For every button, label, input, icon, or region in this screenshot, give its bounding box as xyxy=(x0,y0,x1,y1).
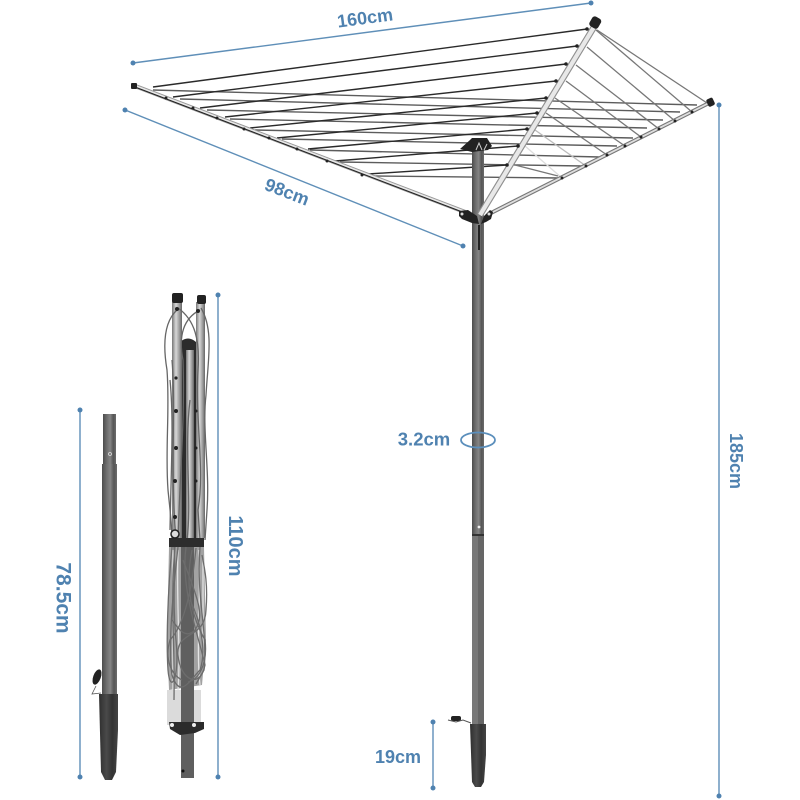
cap and cord xyxy=(91,668,103,694)
bundle stripes xyxy=(173,550,203,690)
tube mark xyxy=(108,452,112,456)
label 19cm: 19cm xyxy=(375,747,421,767)
pole pin hole xyxy=(182,770,184,772)
ground spike xyxy=(99,694,118,780)
diameter ring xyxy=(461,432,495,448)
upper tube xyxy=(103,414,116,464)
dimension line 98cm xyxy=(122,108,466,248)
pole upper section xyxy=(472,150,484,535)
dimension line 185cm xyxy=(716,102,722,798)
open rotary clothes line xyxy=(131,15,715,787)
pole slot below hub xyxy=(478,225,480,250)
pole lower section xyxy=(472,535,484,725)
dimension line 78.5cm xyxy=(78,408,82,780)
arm node markers xyxy=(164,27,694,180)
lower hub bolts xyxy=(460,212,490,216)
bundle backing xyxy=(167,547,206,690)
top hub xyxy=(460,138,492,152)
top hub bolts xyxy=(476,143,487,150)
label 160cm: 160cm xyxy=(336,4,394,32)
strap buckle xyxy=(171,530,179,538)
arm caps xyxy=(172,293,206,304)
label 3.2cm: 3.2cm xyxy=(398,428,450,450)
wires: left arm to top arm xyxy=(153,29,587,174)
bottom hub xyxy=(169,722,204,735)
folded rack dark centre xyxy=(180,338,197,540)
ground spike sleeve xyxy=(470,724,486,787)
label 185cm: 185cm xyxy=(726,433,746,489)
strap xyxy=(169,538,204,547)
arm: left xyxy=(135,86,465,213)
translucent lower arm sections xyxy=(167,690,201,725)
lower hub xyxy=(459,210,493,224)
wires: top arm to right arm xyxy=(515,30,707,178)
dimension line 19cm xyxy=(430,720,436,790)
arm: top xyxy=(480,27,594,215)
label 110cm: 110cm xyxy=(224,515,246,577)
pole joint xyxy=(472,534,484,536)
wire loops upper xyxy=(165,308,209,540)
lower tube xyxy=(102,464,117,694)
node markers xyxy=(173,307,200,519)
arm: right xyxy=(489,102,711,214)
pole pin xyxy=(478,526,480,528)
bottom hub bolts xyxy=(170,723,196,727)
wires: left arm to right arm xyxy=(153,90,697,178)
arm tube centre xyxy=(186,350,194,540)
short pole section xyxy=(91,414,118,780)
lower pole shading xyxy=(478,535,484,725)
label 98cm: 98cm xyxy=(262,174,312,210)
folded rack xyxy=(165,293,209,778)
wire bundle lower xyxy=(167,547,207,700)
dimension line 160cm xyxy=(130,0,594,66)
label 78.5cm: 78.5cm xyxy=(52,562,74,634)
arm tube left xyxy=(172,302,182,538)
spike cap and cord xyxy=(448,716,471,723)
dimension line 110cm xyxy=(216,292,220,780)
folded rack central pole xyxy=(181,540,194,778)
arm tube right xyxy=(196,302,205,538)
arm end caps xyxy=(131,15,715,107)
